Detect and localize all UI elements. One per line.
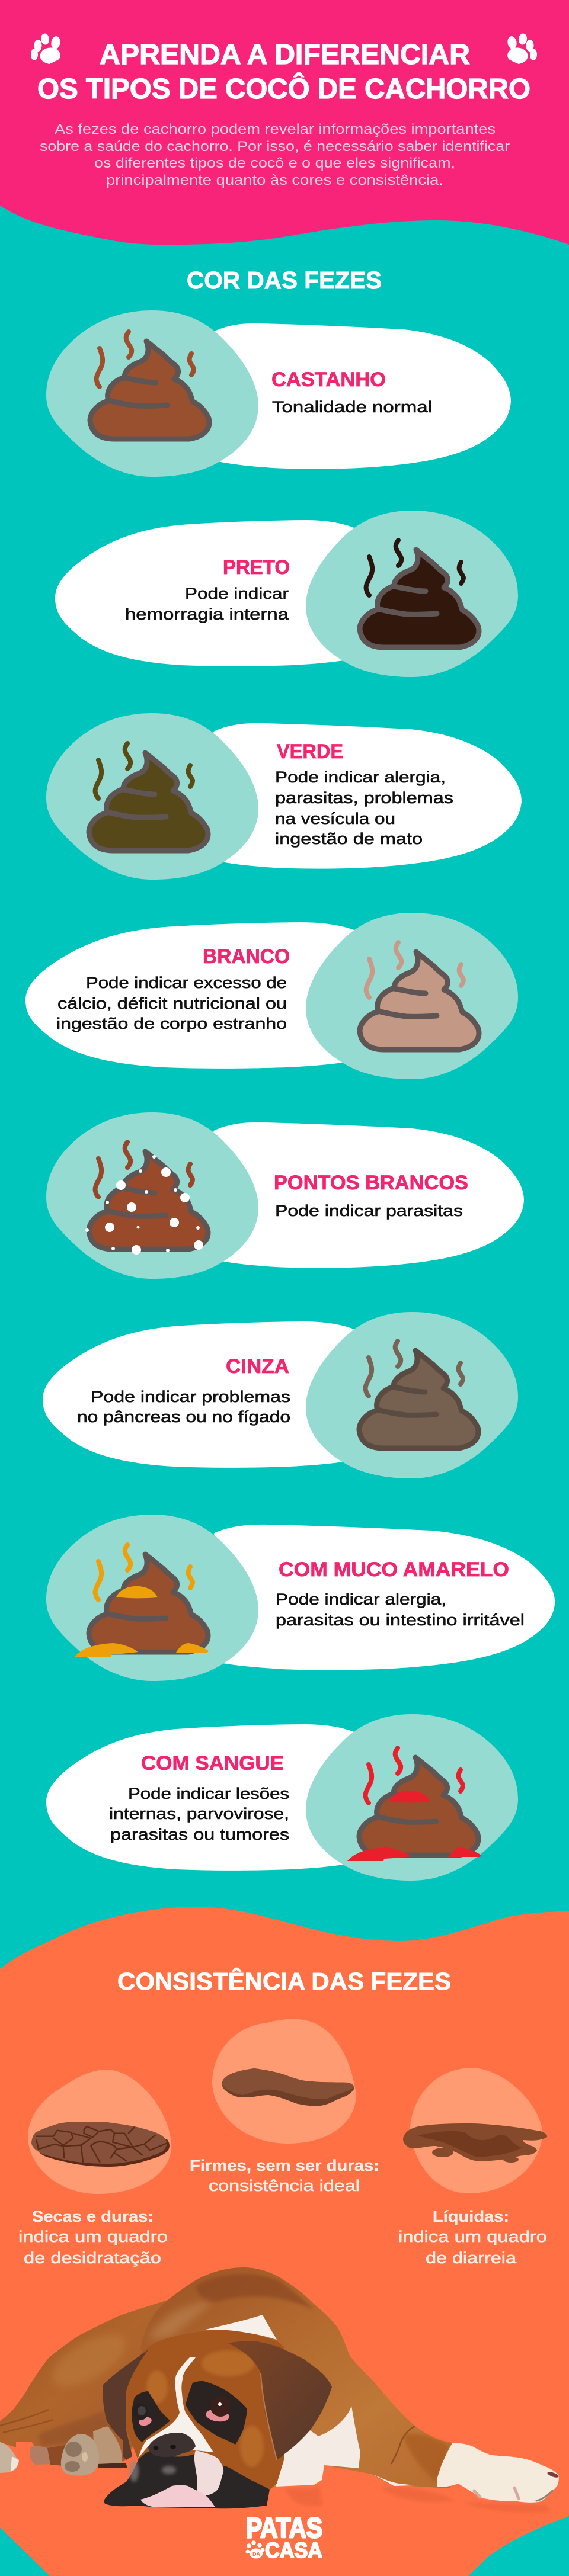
liquidas text: indica um quadro <box>398 2228 547 2245</box>
panel: firmes <box>190 2019 379 2195</box>
com sangue text <box>109 1752 289 1843</box>
icon: poop with yellow mucus <box>75 1545 209 1657</box>
floor reflections <box>284 2487 551 2513</box>
underside white strip <box>372 2474 415 2486</box>
firmes text: Firmes, sem ser duras: <box>190 2157 379 2174</box>
com sangue text: Pode indicar lesões <box>128 1785 289 1802</box>
com muco amarelo text <box>276 1558 525 1629</box>
illustration: sad boxer dog <box>0 2267 560 2513</box>
firmes text: consistência ideal <box>209 2177 360 2195</box>
verde text: Pode indicar alergia, <box>275 768 446 786</box>
cinza text: no pâncreas ou no fígado <box>77 1408 290 1426</box>
panel: secas e duras <box>18 2070 171 2267</box>
pontos brancos text: PONTOS BRANCOS <box>274 1172 468 1194</box>
panel: preto <box>55 511 518 677</box>
branco text: BRANCO <box>203 945 290 968</box>
nose <box>148 2433 196 2457</box>
icon: poop with blood <box>347 1748 481 1861</box>
left ear <box>103 2350 148 2460</box>
header <box>31 33 537 188</box>
pontos brancos text: Pode indicar parasitas <box>275 1202 463 1220</box>
secas text: de desidratação <box>24 2249 161 2267</box>
pink header background <box>0 0 569 245</box>
logo: patas da casa: CASA <box>265 2538 322 2562</box>
castanho text <box>271 368 432 416</box>
cinza text <box>77 1355 290 1426</box>
neck white patch <box>206 2315 277 2340</box>
panel: liquidas <box>398 2068 547 2267</box>
foreleg darker patch <box>403 2434 449 2483</box>
icon: pale poop <box>360 942 479 1050</box>
hind leg hock <box>47 2445 65 2466</box>
intro text: sobre a saúde do cachorro. Por isso, é necessário saber identificar <box>40 139 510 155</box>
intro text: As fezes de cachorro podem revelar informações importantes <box>55 121 496 137</box>
com sangue text: parasitas ou tumores <box>110 1826 289 1843</box>
preto text: PRETO <box>223 556 290 579</box>
icon: logo paw: DA <box>252 2551 260 2557</box>
secas text: Secas e duras: <box>32 2208 154 2225</box>
icon: grey poop <box>359 1341 478 1448</box>
title: OS TIPOS DE COCÔ DE CACHORRO <box>37 72 530 105</box>
heading: cor das fezes: COR DAS FEZES <box>187 267 382 294</box>
muzzle <box>104 2451 270 2508</box>
secas text <box>18 2208 168 2267</box>
intro text: principalmente quanto às cores e consistência. <box>106 172 443 188</box>
branco text: Pode indicar excesso de <box>86 974 287 992</box>
liquidas text: Líquidas: <box>433 2208 509 2225</box>
belly shade <box>39 2411 113 2446</box>
com muco amarelo text: COM MUCO AMARELO <box>279 1558 509 1581</box>
icon: green poop <box>89 743 208 851</box>
left paw <box>0 2442 19 2473</box>
shadow under body <box>98 2463 127 2468</box>
icon: black poop <box>360 540 479 647</box>
hind leg underside <box>30 2446 50 2465</box>
white jowl <box>194 2450 223 2496</box>
icon: dry cracked stool <box>31 2122 170 2167</box>
muzzle grey mottling <box>129 2460 176 2482</box>
panel: branco <box>25 913 518 1079</box>
backdrop egg <box>410 2068 542 2193</box>
verde text: ingestão de mato <box>275 830 423 848</box>
com sangue text: internas, parvovirose, <box>109 1805 289 1823</box>
toes and claws <box>474 2471 560 2501</box>
preto text: hemorragia interna <box>125 605 289 623</box>
logo: patas da casa: PATAS <box>246 2513 322 2544</box>
verde text: VERDE <box>277 740 343 763</box>
cinza text: Pode indicar problemas <box>91 1388 290 1406</box>
ear edge <box>261 2373 277 2460</box>
inner tan leg <box>93 2427 122 2464</box>
liquidas text: de diarreia <box>426 2249 517 2267</box>
hump dark gloss <box>196 2274 314 2310</box>
panel: com sangue <box>46 1714 518 1881</box>
backdrop egg <box>212 2019 356 2144</box>
right ear <box>228 2341 332 2460</box>
com muco amarelo text: parasitas ou intestino irritável <box>276 1611 525 1629</box>
rear paw <box>61 2434 99 2476</box>
icon: poop with white dots <box>85 1142 208 1255</box>
secas text: indica um quadro <box>18 2228 168 2245</box>
icon: liquid stool <box>403 2123 547 2163</box>
verde text: na vesícula ou <box>275 810 395 827</box>
branco text <box>56 945 290 1032</box>
heading: consistência das fezes: CONSISTÊNCIA DAS FEZES <box>117 1968 451 1995</box>
bottom right teal corner <box>468 2516 569 2576</box>
white blaze <box>138 2357 213 2458</box>
intro text <box>40 121 510 188</box>
logo: patas da casa <box>246 2513 322 2562</box>
panel: pontos brancos <box>46 1112 524 1279</box>
forehead highlights <box>146 2350 264 2467</box>
preto text <box>125 556 290 623</box>
verde text: parasitas, problemas <box>275 789 453 807</box>
right eye patch <box>186 2381 247 2445</box>
left eye <box>133 2404 152 2427</box>
cinza text: CINZA <box>226 1355 289 1378</box>
branco text: ingestão de corpo estranho <box>56 1015 287 1032</box>
front leg white <box>437 2443 559 2503</box>
body shoulder <box>140 2267 452 2488</box>
com sangue text: COM SANGUE <box>141 1752 284 1775</box>
orange footer background <box>0 1907 569 2576</box>
intro text: os diferentes tipos de cocô e o que eles significam, <box>94 155 455 171</box>
lip <box>140 2485 215 2507</box>
backdrop egg <box>28 2070 171 2194</box>
hump light band <box>148 2301 213 2340</box>
title <box>37 39 530 105</box>
verde text <box>275 740 453 848</box>
right eye <box>205 2397 231 2423</box>
firmes text <box>190 2157 379 2195</box>
icon: firm stool <box>222 2068 354 2106</box>
icon: right paw <box>507 33 537 64</box>
head <box>126 2330 284 2491</box>
preto text: Pode indicar <box>185 585 289 602</box>
panel: cinza <box>43 1312 518 1478</box>
pontos brancos text <box>274 1172 468 1220</box>
branco text: cálcio, déficit nutricional ou <box>57 995 287 1012</box>
panel: com muco amarelo <box>46 1515 555 1681</box>
hind body <box>0 2300 178 2466</box>
castanho text: Tonalidade normal <box>272 398 432 416</box>
bottom left teal corner <box>0 2527 50 2576</box>
castanho text: CASTANHO <box>271 368 386 391</box>
panel: castanho <box>46 310 511 477</box>
foreleg crease <box>391 2426 415 2464</box>
panel: verde <box>46 713 522 880</box>
chest white patch <box>276 2406 360 2487</box>
thigh highlight <box>44 2324 134 2397</box>
left eye patch <box>132 2391 170 2442</box>
icon: left paw <box>31 33 61 64</box>
title: APRENDA A DIFERENCIAR <box>100 39 470 70</box>
leg folds <box>0 2410 53 2433</box>
liquidas text <box>398 2208 547 2267</box>
icon: brown poop <box>90 332 209 439</box>
com muco amarelo text: Pode indicar alergia, <box>276 1590 446 1608</box>
